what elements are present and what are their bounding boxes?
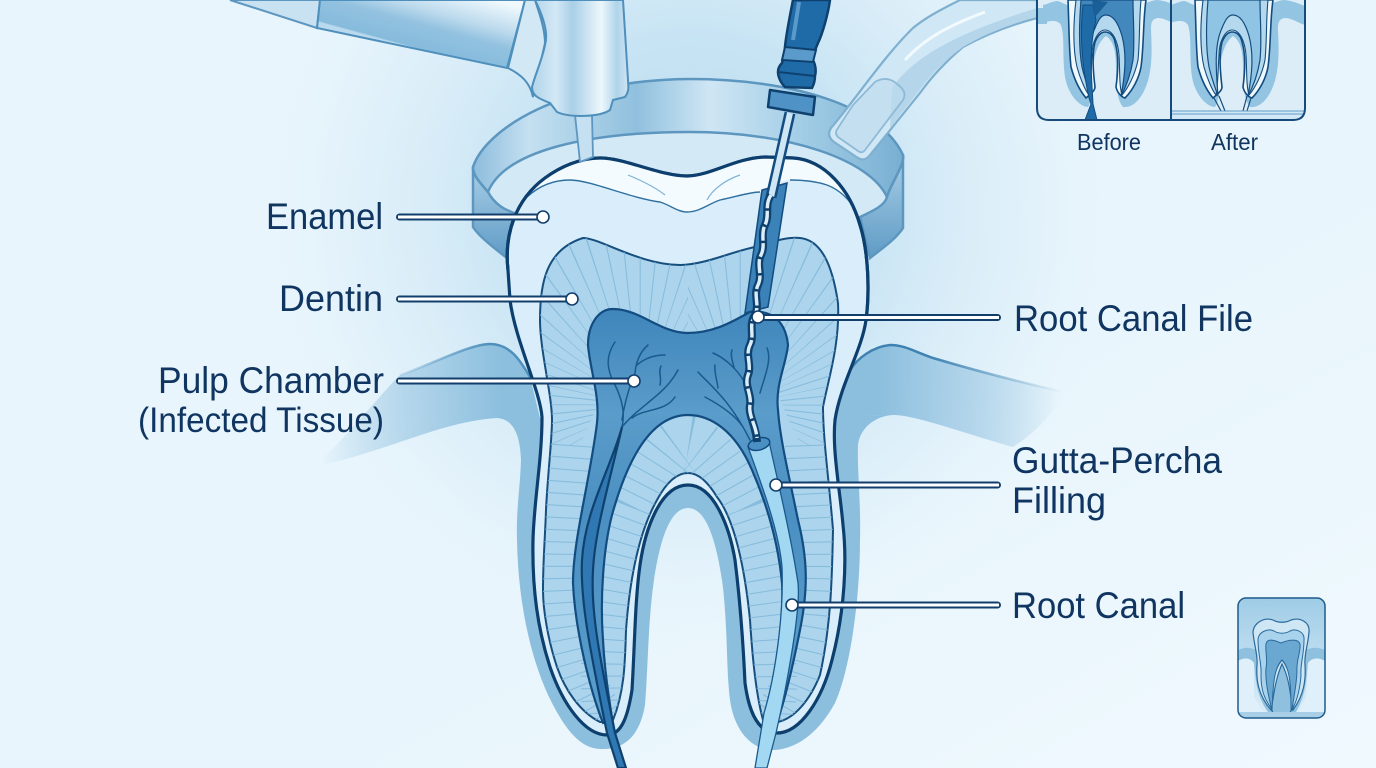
label: pulp chamber: (Infected Tissue) (138, 401, 384, 440)
rubber dam ring (473, 79, 903, 258)
file flutes (747, 195, 771, 442)
inset panel background (1037, 0, 1305, 120)
before and after inset (1037, 0, 1305, 120)
file access channel (745, 183, 787, 313)
gutta-percha filling (747, 435, 798, 768)
enamel and cementum outline (507, 157, 868, 735)
leader: root canal file (752, 311, 1001, 323)
leader: pulp chamber (396, 375, 640, 387)
root canal file (745, 0, 830, 442)
thumbnail tooth icon (1238, 598, 1325, 718)
label: gutta-percha filling (1012, 440, 1222, 521)
dental handpiece (230, 0, 628, 162)
pulp chamber (573, 309, 806, 723)
leader: dentin (396, 293, 578, 305)
label: dentin: Dentin (279, 278, 383, 319)
file handle (778, 0, 830, 88)
before tooth (1037, 0, 1178, 120)
enamel highlight (527, 157, 857, 213)
label: root canal file: Root Canal File (1014, 298, 1253, 339)
after label: After (1211, 129, 1258, 155)
before label: Before (1077, 129, 1141, 155)
dentin (540, 238, 838, 722)
nerve branches (608, 342, 769, 440)
label: gutta-percha filling: Gutta-Percha (1012, 440, 1222, 481)
suction tube (829, 0, 1037, 159)
left root canal (582, 427, 626, 768)
leader: root canal (786, 599, 1001, 611)
leader: gutta-percha (770, 479, 1001, 491)
label: gutta-percha filling: Filling (1012, 480, 1106, 521)
label: root canal: Root Canal (1012, 585, 1185, 626)
dentin tubule rays (540, 238, 838, 721)
leader: enamel (396, 211, 549, 223)
inset panel frame (1037, 0, 1305, 120)
after tooth (1170, 0, 1305, 120)
label: enamel: Enamel (266, 196, 383, 237)
tooth (507, 157, 870, 768)
label: pulp chamber: Pulp Chamber (158, 360, 384, 401)
label: pulp chamber (138, 360, 384, 440)
file shaft (771, 113, 790, 197)
file stopper (768, 90, 815, 115)
gum tissue (313, 344, 1063, 750)
